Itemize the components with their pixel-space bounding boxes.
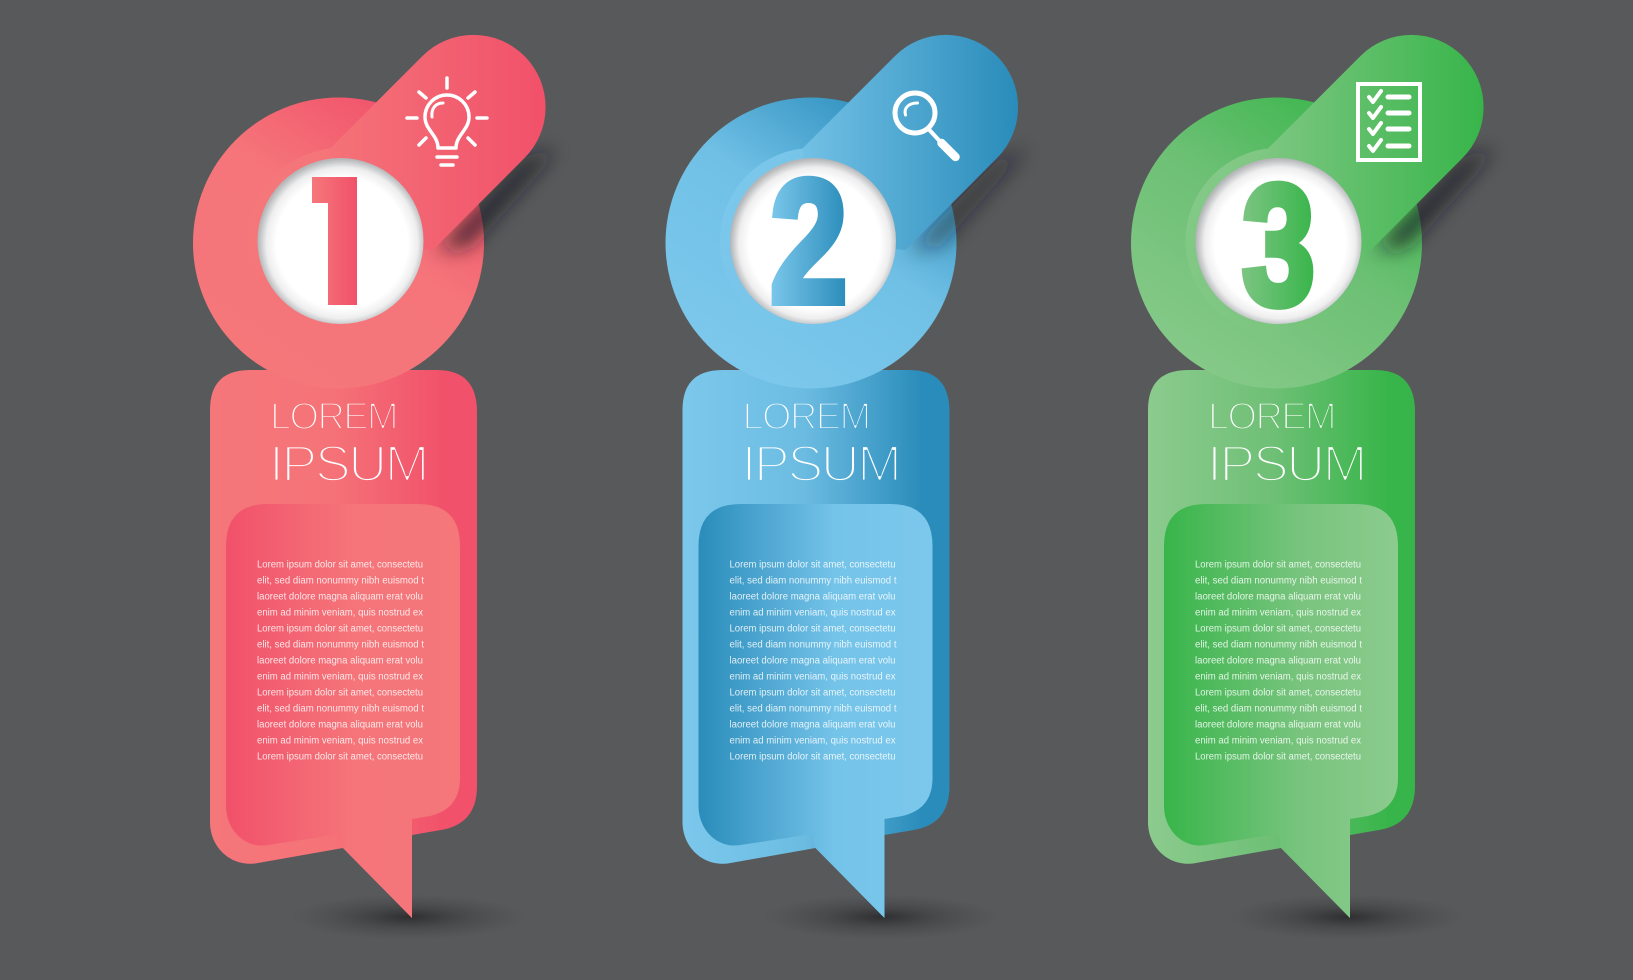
body text: Lorem ipsum dolor sit amet, consectetu: [1195, 688, 1361, 698]
body text: enim ad minim veniam, quis nostrud ex: [1195, 672, 1361, 682]
heading: IPSUM: [1207, 435, 1365, 492]
tab shadow: [910, 148, 1028, 250]
body text: enim ad minim veniam, quis nostrud ex: [730, 608, 896, 618]
body text: Lorem ipsum dolor sit amet, consectetu: [730, 560, 896, 570]
body text: Lorem ipsum dolor sit amet, consectetu: [257, 688, 423, 698]
body text: Lorem ipsum dolor sit amet, consectetu: [1195, 560, 1361, 570]
body text: Lorem ipsum dolor sit amet, consectetu: [1195, 752, 1361, 762]
body text: laoreet dolore magna aliquam erat volu: [730, 720, 896, 730]
body text: elit, sed diam nonummy nibh euismod t: [257, 576, 424, 586]
body text: Lorem ipsum dolor sit amet, consectetu: [730, 752, 896, 762]
body text: enim ad minim veniam, quis nostrud ex: [257, 672, 423, 682]
number 3: 3: [1242, 150, 1315, 341]
main circle: [666, 98, 956, 388]
heading: [269, 396, 427, 492]
speech bubble body: [1148, 370, 1415, 918]
body text: Lorem ipsum dolor sit amet, consectetu: [257, 752, 423, 762]
heading: LOREM: [742, 396, 870, 438]
tab shadow: [438, 148, 556, 250]
tab with icon: [802, 35, 1018, 250]
ground shadow: [1229, 894, 1465, 940]
body text: enim ad minim veniam, quis nostrud ex: [257, 736, 423, 746]
body text: elit, sed diam nonummy nibh euismod t: [1195, 704, 1362, 714]
white number disc: [1196, 158, 1362, 324]
icon: checklist: [1358, 84, 1420, 160]
ring around disc: [248, 148, 434, 334]
inner text panel with tail: [698, 504, 932, 918]
ring around disc: [720, 148, 906, 334]
body text: elit, sed diam nonummy nibh euismod t: [1195, 576, 1362, 586]
body text: laoreet dolore magna aliquam erat volu: [1195, 656, 1361, 666]
body text: elit, sed diam nonummy nibh euismod t: [257, 640, 424, 650]
body text: elit, sed diam nonummy nibh euismod t: [730, 640, 897, 650]
body text: enim ad minim veniam, quis nostrud ex: [730, 672, 896, 682]
body text: laoreet dolore magna aliquam erat volu: [1195, 592, 1361, 602]
tab shadow: [1376, 148, 1494, 250]
body text: laoreet dolore magna aliquam erat volu: [257, 656, 423, 666]
body text: [730, 560, 897, 762]
inner text panel with tail: [1164, 504, 1398, 918]
body text: [1195, 560, 1362, 762]
tab with icon: [1268, 35, 1484, 250]
speech bubble body: [210, 370, 477, 918]
body text: elit, sed diam nonummy nibh euismod t: [730, 576, 897, 586]
ring around disc: [1186, 148, 1372, 334]
panel: step 1 (red): [193, 35, 556, 940]
body text: laoreet dolore magna aliquam erat volu: [1195, 720, 1361, 730]
body text: Lorem ipsum dolor sit amet, consectetu: [257, 560, 423, 570]
body text: [257, 560, 424, 762]
body text: enim ad minim veniam, quis nostrud ex: [730, 736, 896, 746]
number 1: 1: [294, 138, 382, 345]
body text: elit, sed diam nonummy nibh euismod t: [1195, 640, 1362, 650]
body text: Lorem ipsum dolor sit amet, consectetu: [730, 688, 896, 698]
panel: step 3 (green): [1131, 35, 1494, 940]
heading: LOREM: [1208, 396, 1335, 438]
body text: enim ad minim veniam, quis nostrud ex: [1195, 608, 1361, 618]
body text: laoreet dolore magna aliquam erat volu: [257, 720, 423, 730]
panel: step 2 (blue): [666, 35, 1028, 940]
heading: [1207, 396, 1365, 492]
main circle: [193, 98, 484, 388]
ground shadow: [764, 894, 1000, 940]
body text: Lorem ipsum dolor sit amet, consectetu: [1195, 624, 1361, 634]
body text: laoreet dolore magna aliquam erat volu: [730, 592, 896, 602]
body text: Lorem ipsum dolor sit amet, consectetu: [257, 624, 423, 634]
infographic canvas: [193, 34, 1494, 932]
body text: laoreet dolore magna aliquam erat volu: [257, 592, 423, 602]
main circle: [1131, 98, 1422, 388]
heading: IPSUM: [269, 435, 427, 492]
body text: Lorem ipsum dolor sit amet, consectetu: [730, 624, 896, 634]
body text: elit, sed diam nonummy nibh euismod t: [730, 704, 897, 714]
icon: light bulb: [407, 78, 487, 165]
white number disc: [730, 158, 896, 324]
icon: magnifying glass: [895, 93, 956, 157]
body text: enim ad minim veniam, quis nostrud ex: [1195, 736, 1361, 746]
tab with icon: [330, 35, 546, 250]
white number disc: [258, 158, 424, 324]
heading: LOREM: [270, 396, 397, 438]
heading: IPSUM: [742, 435, 900, 492]
body text: laoreet dolore magna aliquam erat volu: [730, 656, 896, 666]
number 2: 2: [770, 145, 848, 340]
body text: elit, sed diam nonummy nibh euismod t: [257, 704, 424, 714]
speech bubble body: [682, 370, 950, 918]
inner text panel with tail: [226, 504, 460, 918]
ground shadow: [291, 894, 527, 940]
body text: enim ad minim veniam, quis nostrud ex: [257, 608, 423, 618]
heading: [742, 396, 900, 492]
